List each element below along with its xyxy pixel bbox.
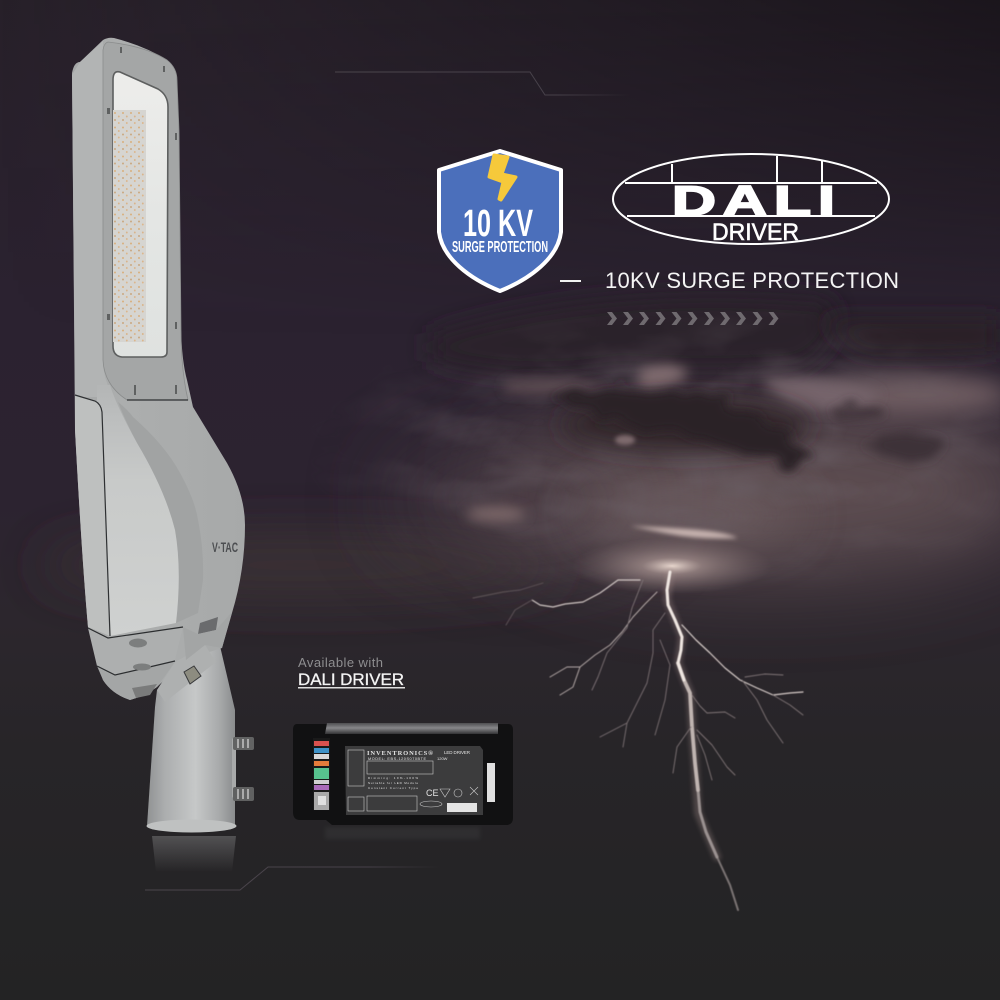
- face plate: [103, 42, 188, 400]
- lamp left side highlight: [72, 41, 113, 397]
- main strike bottom: [717, 857, 738, 910]
- logo ellipse and grid: [613, 154, 889, 244]
- icon: lightning bolt: [489, 155, 516, 200]
- label: available with DALI driver: [298, 655, 405, 689]
- left branch C: [592, 580, 643, 690]
- badge: 10 KV surge protection shield: [439, 151, 561, 291]
- knuckle bolt: [184, 666, 201, 684]
- clamp: [88, 627, 183, 675]
- driver label text: LED DRIVER: [444, 750, 471, 755]
- DALI LED driver unit: [293, 723, 513, 839]
- driver top strip: [325, 723, 498, 734]
- driver body: [293, 724, 513, 825]
- right branch: [682, 625, 803, 695]
- background: night sky: [0, 0, 1000, 646]
- bracket lip: [183, 612, 232, 660]
- far left branch: [473, 583, 543, 625]
- bracket opening: [198, 617, 218, 634]
- barcode sticker: [487, 763, 495, 802]
- dash: [560, 280, 581, 282]
- main strike glow: [667, 572, 717, 857]
- main strike lower: [698, 790, 717, 857]
- pole reflection: [152, 836, 236, 872]
- left branch A: [532, 580, 640, 607]
- storm clouds: [380, 312, 1000, 616]
- light body panel: [97, 385, 179, 636]
- base cloud glow: [490, 405, 1000, 575]
- shield body: [439, 151, 561, 291]
- dark central cloud shadow: [560, 397, 810, 453]
- decorative connector lines: [145, 72, 1000, 890]
- clamp lower: [97, 662, 175, 700]
- neck infill: [157, 645, 216, 702]
- dark right clouds: [860, 434, 950, 462]
- driver label text: Constant Current Type: [368, 786, 418, 790]
- pole base: [146, 820, 236, 832]
- lightning glow: [572, 538, 772, 594]
- street lamp: [72, 38, 254, 872]
- driver reflection: [325, 827, 480, 839]
- label line 1: Available with: [298, 655, 383, 670]
- bright streak: [630, 526, 738, 538]
- lightning bolt: [473, 572, 803, 910]
- heading: 10KV surge protection: 10KV SURGE PROTECTION: [605, 268, 899, 293]
- main strike middle: [678, 663, 698, 790]
- left side panel: [75, 396, 110, 636]
- driver label text: 120W: [437, 756, 448, 761]
- LED panel: [113, 110, 146, 342]
- face plate and side seams: [75, 395, 188, 636]
- pale patches: [466, 506, 526, 522]
- lens window: [113, 72, 168, 357]
- shield value: 10 KV: [463, 203, 533, 245]
- clamp slot: [132, 684, 157, 698]
- logo: DALI driver: [613, 154, 889, 246]
- mounting pole: [147, 646, 235, 826]
- rating sticker: [447, 803, 477, 812]
- driver label text: Dimming: 10%-100%: [368, 776, 418, 780]
- lamp housing: [72, 38, 245, 700]
- dark central cloud: [545, 388, 815, 465]
- terminal block: [313, 738, 330, 810]
- driver label details: [348, 750, 478, 811]
- pole bolts: [232, 737, 254, 801]
- left branch D: [600, 613, 670, 747]
- driver label text: INVENTRONICS®: [367, 750, 433, 757]
- label line 2: DALI DRIVER: [298, 670, 404, 689]
- V-TAC logo: V·TAC: [212, 540, 238, 555]
- right fine branches: [673, 674, 803, 780]
- driver label text: Suitable for LED Module: [368, 781, 418, 785]
- logo wordmark: DALI: [672, 178, 842, 225]
- logo subtitle: DRIVER: [712, 219, 799, 246]
- clamp seams: [88, 627, 183, 675]
- screws: [107, 47, 177, 395]
- dark upper cloud band: [430, 295, 836, 375]
- dark strip: [118, 402, 203, 623]
- driver label text: CE: [426, 788, 439, 798]
- driver label text: [367, 750, 471, 798]
- lit cloud wisps: [640, 364, 690, 389]
- chevron row: [607, 312, 778, 325]
- shield caption: SURGE PROTECTION: [452, 239, 548, 256]
- clamp holes: [129, 638, 151, 670]
- underline: [298, 687, 405, 688]
- cloud texture: [414, 326, 972, 531]
- left branch B: [550, 592, 657, 695]
- driver label: [345, 746, 483, 815]
- main strike upper: [667, 572, 684, 680]
- driver label text: MODEL: EBS-120S070BTE: [368, 757, 426, 761]
